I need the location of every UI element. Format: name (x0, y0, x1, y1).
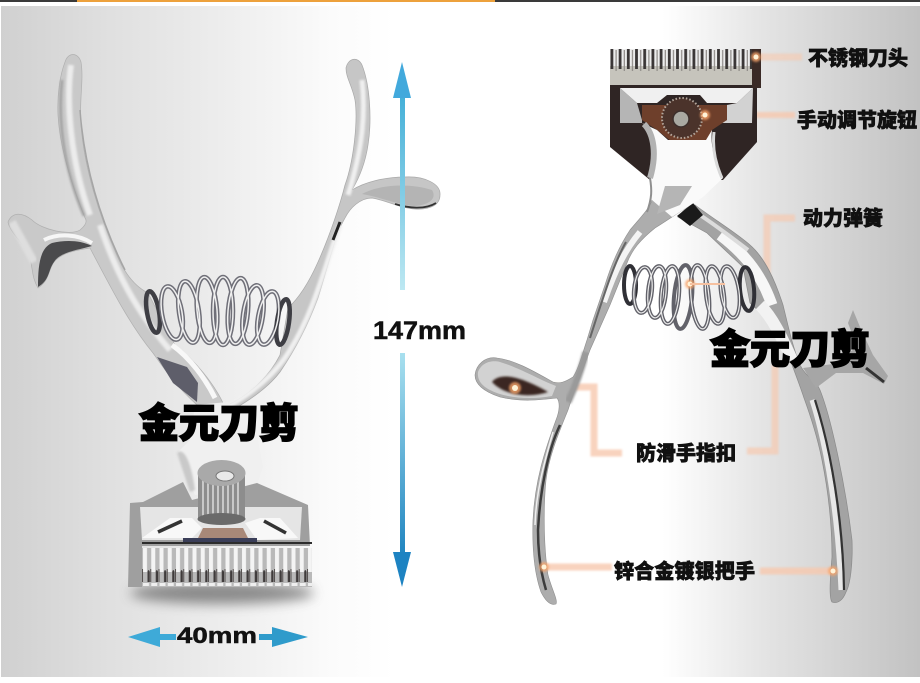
clipper shadow (130, 582, 314, 604)
adjustment knob (198, 460, 246, 525)
left handle (475, 195, 690, 604)
spring (624, 264, 756, 330)
top strip (0, 0, 920, 2)
dimension: height: 147mm (373, 317, 466, 345)
right finger shading (362, 185, 434, 206)
comb teeth (610, 49, 752, 85)
right handle (205, 59, 440, 424)
right handle (677, 203, 888, 603)
label: knob: 手动调节旋钮 (797, 108, 917, 132)
label: finger rest: 防滑手指扣 (636, 441, 736, 465)
brand left: 金元刀剪 (139, 402, 299, 446)
brown centre (642, 105, 727, 142)
left finger rest (478, 361, 556, 398)
teeth (142, 548, 312, 587)
right handle highlights (720, 235, 772, 305)
dimension: width: 40mm (177, 623, 257, 648)
label: handle: 锌合金镀银把手 (614, 559, 755, 583)
height arrow (393, 62, 411, 587)
label: blade: 不锈钢刀头 (808, 47, 908, 70)
callout lines (512, 57, 832, 571)
knob (662, 98, 702, 138)
blade frame (128, 482, 310, 587)
left handle highlights (69, 65, 170, 350)
spring (143, 276, 292, 346)
left clipper (8, 54, 440, 604)
left handle reflection (157, 357, 198, 402)
dark pivot (677, 203, 703, 226)
silver frame (620, 88, 753, 123)
blade plate (140, 507, 302, 540)
brand right: 金元刀剪 (710, 328, 870, 372)
blade stem (642, 123, 723, 217)
right finger rest (803, 310, 888, 388)
right handle highlights (225, 80, 363, 408)
left handle highlights (604, 232, 640, 302)
left handle (8, 54, 224, 405)
clipper neck (177, 402, 263, 495)
callout dots (509, 52, 838, 576)
left finger rest shading (38, 241, 92, 287)
right clipper (475, 49, 888, 604)
width arrows (128, 627, 308, 647)
label: spring: 动力弹簧 (803, 206, 883, 230)
blade bevels (142, 518, 312, 544)
back plate (610, 85, 757, 180)
